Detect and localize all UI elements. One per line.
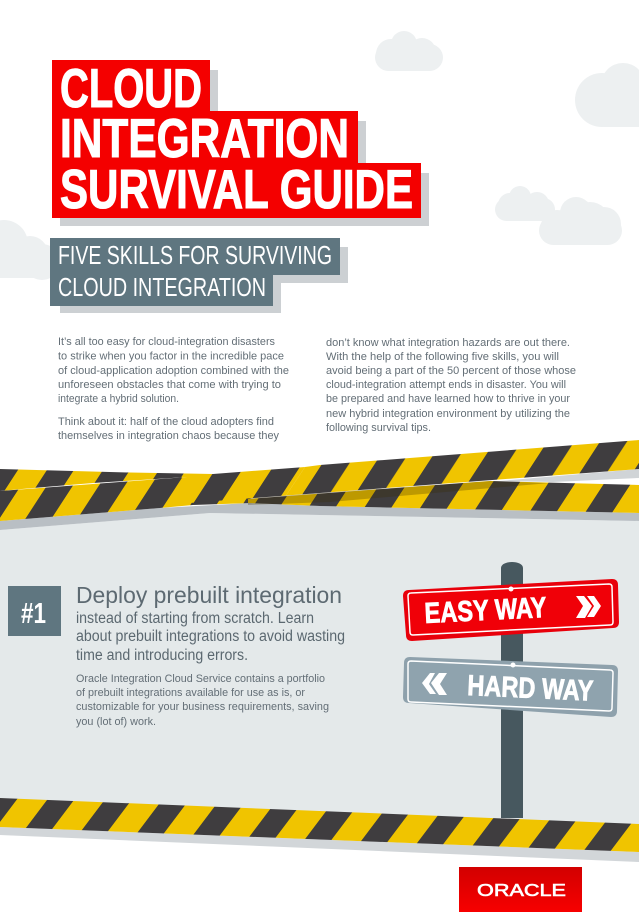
cloud: middle right small (495, 186, 555, 221)
sign: hard way (403, 657, 618, 717)
oracle logo: ORACLE (477, 880, 566, 900)
intro text: left column: integrate a hybrid solution. (58, 393, 179, 405)
skill detail text: you (lot of) work. (76, 716, 156, 728)
icon: double chevron right (576, 596, 601, 618)
intro text: left column: Think about it: half of the cloud adopters find (58, 416, 274, 428)
skill lead text: about prebuilt integrations to avoid wasting (76, 628, 345, 645)
skill lead text: instead of starting from scratch. Learn (76, 610, 314, 627)
intro text: right column: don’t know what integration hazards are out there. (326, 337, 570, 349)
title text: SURVIVAL GUIDE (60, 158, 413, 220)
intro text: right column: With the help of the following five skills, you will (326, 351, 559, 363)
tape strip (0, 798, 639, 852)
signpost (403, 562, 619, 818)
cloud: top centre (375, 31, 443, 71)
sign: hard way: HARD WAY (467, 670, 594, 708)
intro text: right column: be prepared and have learned how to thrive in your (326, 393, 570, 405)
sign: easy way (403, 579, 619, 641)
panel: grey section background (0, 513, 639, 840)
skill lead text: time and introducing errors. (76, 647, 248, 664)
oracle logo (459, 867, 582, 912)
skill detail text: of prebuilt integrations available for use as is, or (76, 687, 305, 699)
cloud: middle right large (539, 197, 622, 245)
skill number badge: #1 (21, 598, 46, 630)
caution tape: top (0, 440, 639, 530)
title text (60, 57, 413, 220)
skill lead text (76, 610, 345, 664)
intro text: right column (326, 337, 576, 434)
cloud: top right (575, 63, 639, 127)
tape: upper left strip (0, 467, 305, 503)
intro text: left column (58, 336, 289, 442)
intro text: right column: avoid being a part of the 50 percent of those whose (326, 365, 576, 377)
intro text: right column: following survival tips. (326, 422, 431, 434)
icon: double chevron left (422, 673, 447, 695)
subtitle shadow (60, 247, 348, 313)
intro text: left column: themselves in integration chaos because they (58, 430, 279, 442)
background clouds (0, 31, 639, 280)
skill detail text: Oracle Integration Cloud Service contains a portfolio (76, 673, 325, 685)
intro text: right column: cloud-integration attempt ends in disaster. You will (326, 379, 566, 391)
caution tape: bottom (0, 798, 639, 862)
title shadow (60, 70, 429, 226)
title text: CLOUD (60, 57, 202, 119)
post (501, 562, 523, 818)
tape shadow band (0, 827, 639, 862)
tape: fold shadow (248, 481, 550, 505)
skill detail text: customizable for your business requirements, saving (76, 701, 329, 713)
intro text: left column: It’s all too easy for cloud-integration disasters (58, 336, 275, 348)
tape: lower right strip (248, 481, 639, 513)
title text: INTEGRATION (60, 107, 349, 169)
title (52, 57, 429, 226)
intro text: left column: unforeseen obstacles that come with trying to (58, 379, 281, 391)
intro text: left column: to strike when you factor in the incredible pace (58, 350, 284, 362)
intro text: right column: new hybrid integration environment by utilizing the (326, 408, 570, 420)
cloud: left (0, 220, 60, 280)
title red background (52, 60, 421, 218)
sign: easy way: EASY WAY (424, 592, 547, 630)
skill number badge (8, 586, 61, 636)
intro text: left column: of cloud-application adoption combined with the (58, 365, 289, 377)
subtitle background (50, 238, 340, 306)
subtitle (50, 238, 348, 313)
subtitle text: FIVE SKILLS FOR SURVIVING (58, 240, 332, 270)
subtitle text: CLOUD INTEGRATION (58, 272, 266, 302)
tape: lower left strip (0, 477, 252, 521)
tape shadow band (0, 503, 639, 530)
tape: shadow under upper strip (500, 469, 639, 482)
skill heading: Deploy prebuilt integration (76, 582, 342, 608)
skill detail text (76, 673, 329, 728)
subtitle text (58, 240, 332, 302)
tape: upper right strip (286, 440, 639, 496)
